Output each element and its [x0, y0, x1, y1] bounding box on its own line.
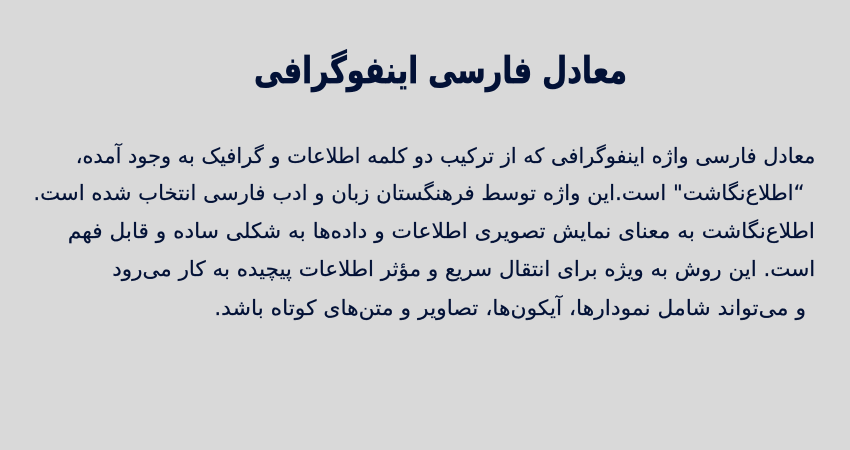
title: معادل فارسی اینفوگرافی: [254, 49, 627, 92]
paragraph line 1: معادل فارسی واژه اینفوگرافی که از ترکیب دو کلمه اطلاعات و گرافیک به وجود آمده،: [75, 144, 815, 168]
paragraph line 2: “اطلاع‌نگاشت" است.این واژه توسط فرهنگستان زبان و ادب فارسی انتخاب شده است.: [34, 181, 805, 205]
paragraph line 4: است. این روش به ویژه برای انتقال سریع و مؤثر اطلاعات پیچیده به کار می‌رود: [112, 257, 815, 281]
paragraph line 3: اطلاع‌نگاشت به معنای نمایش تصویری اطلاعات و داده‌ها به شکلی ساده و قابل فهم: [68, 219, 815, 243]
paragraph line 5: و می‌تواند شامل نمودارها، آیکون‌ها، تصاویر و متن‌های کوتاه باشد.: [214, 296, 806, 320]
